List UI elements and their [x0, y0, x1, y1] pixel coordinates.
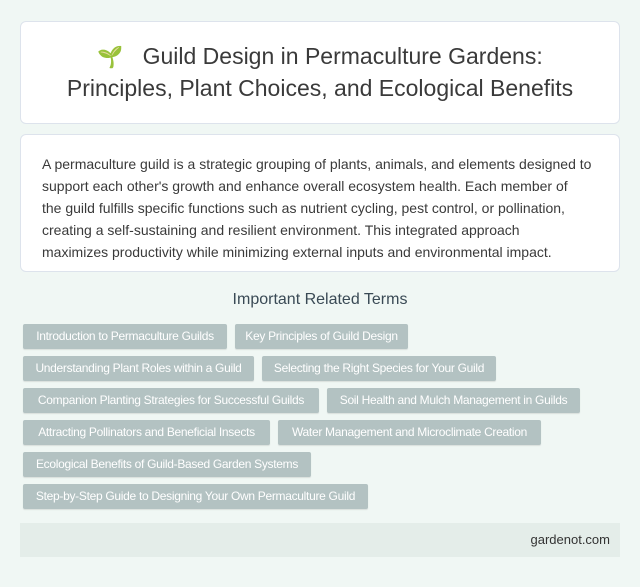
- footer: [20, 523, 620, 557]
- tag: [278, 420, 541, 445]
- title card: [20, 21, 620, 124]
- footer source: gardenot.com: [530, 532, 610, 547]
- tag: Water Management and Microclimate Creation: [292, 425, 527, 439]
- tag: [23, 324, 227, 349]
- tag: Companion Planting Strategies for Successful Guilds: [38, 393, 304, 407]
- description text: [42, 156, 591, 260]
- description text: maximizes productivity while minimizing external inputs and environmental impact.: [42, 244, 552, 260]
- title: [67, 43, 573, 101]
- description card: [20, 134, 620, 272]
- tag: [23, 388, 319, 413]
- tag: [262, 356, 496, 381]
- tag: [23, 452, 311, 477]
- tag: Introduction to Permaculture Guilds: [36, 329, 214, 343]
- tag: [23, 484, 368, 509]
- title: Principles, Plant Choices, and Ecological Benefits: [67, 75, 573, 101]
- description text: creating a self-sustaining and resilient environment. This integrated approach: [42, 222, 520, 238]
- tag: Understanding Plant Roles within a Guild: [35, 361, 242, 375]
- description text: support each other's growth and enhance overall ecosystem health. Each member of: [42, 178, 568, 194]
- tag: Soil Health and Mulch Management in Guilds: [340, 393, 567, 407]
- tag: Key Principles of Guild Design: [245, 329, 398, 343]
- tag: [23, 356, 254, 381]
- description text: A permaculture guild is a strategic grouping of plants, animals, and elements designed to: [42, 156, 591, 172]
- tag: [327, 388, 580, 413]
- tag: Attracting Pollinators and Beneficial Insects: [38, 425, 255, 439]
- description text: the guild fulfills specific functions such as nutrient cycling, pest control, or pollination,: [42, 200, 565, 216]
- tag: Ecological Benefits of Guild-Based Garden Systems: [36, 457, 298, 471]
- tag: Step-by-Step Guide to Designing Your Own Permaculture Guild: [36, 489, 355, 503]
- tag: Selecting the Right Species for Your Guild: [274, 361, 484, 375]
- title: 🌱 Guild Design in Permaculture Gardens:: [97, 43, 543, 69]
- related terms heading: Important Related Terms: [233, 291, 407, 308]
- tag: [235, 324, 408, 349]
- tag: [23, 420, 270, 445]
